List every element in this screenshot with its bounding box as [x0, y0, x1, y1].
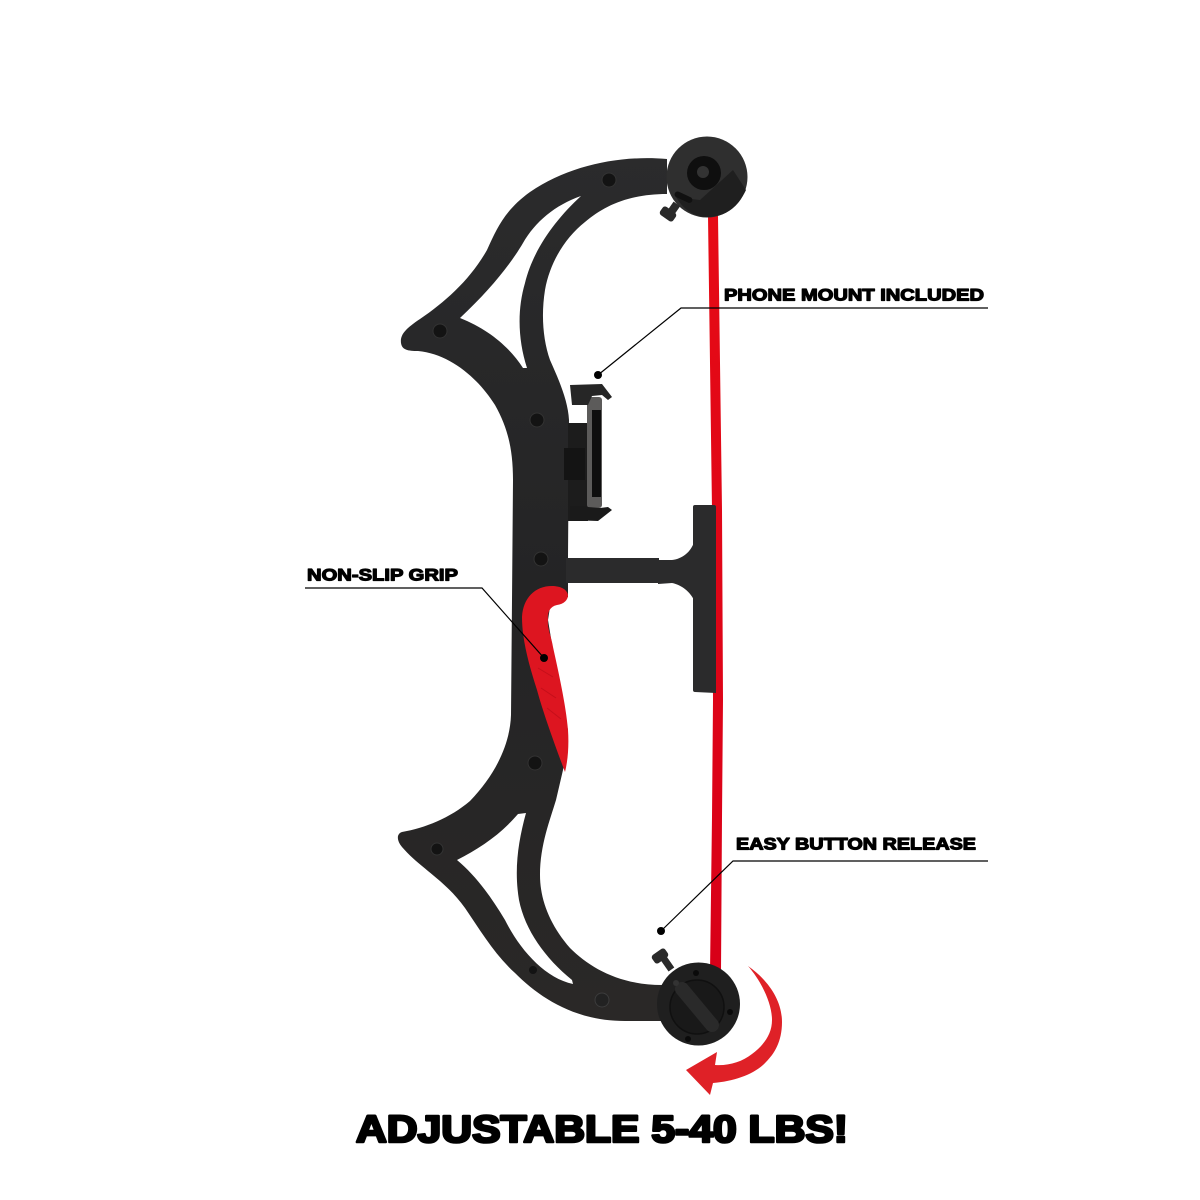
phone mount label: PHONE MOUNT INCLUDED	[724, 285, 984, 304]
stabilizer T-handle	[566, 505, 716, 693]
top pulley	[659, 136, 748, 223]
top pulley slot	[674, 190, 693, 204]
phone mount	[564, 384, 612, 521]
mount body	[568, 423, 588, 521]
handle plate	[693, 505, 716, 693]
top pulley disc	[666, 136, 748, 218]
bow riser and limbs	[398, 158, 667, 1021]
callout: phone mount	[594, 285, 988, 379]
top pulley hub	[687, 156, 721, 190]
phone mount dot	[594, 371, 602, 379]
bottom pulley	[651, 947, 740, 1046]
button release dot	[657, 927, 665, 935]
callout: non-slip grip	[305, 565, 548, 662]
bowstring	[708, 216, 723, 972]
bow	[398, 158, 667, 1021]
top pulley shading	[676, 170, 746, 217]
bottom release button	[651, 947, 674, 971]
bottom pulley disc	[657, 962, 740, 1046]
grip leader line	[305, 588, 544, 658]
top clip	[570, 384, 612, 405]
callout: easy button release	[657, 834, 988, 935]
grip dot	[540, 654, 548, 662]
top release button	[659, 202, 680, 223]
top pulley screw	[697, 166, 709, 178]
flared neck	[658, 542, 694, 600]
phone edge	[587, 397, 602, 508]
button release leader line	[661, 861, 988, 931]
mount side block	[564, 448, 585, 480]
bow screws	[431, 173, 616, 1007]
title: ADJUSTABLE 5-40 LBS!	[356, 1109, 848, 1151]
phone screen	[592, 410, 601, 497]
red grip	[522, 586, 568, 772]
grip ridges	[538, 668, 561, 719]
grip shape	[522, 586, 568, 772]
red rotation arrow	[686, 966, 782, 1095]
phone mount leader line	[598, 308, 988, 375]
grip label: NON-SLIP GRIP	[307, 565, 458, 584]
bottom pulley cover	[670, 980, 724, 1034]
button release label: EASY BUTTON RELEASE	[736, 834, 976, 853]
bottom pulley screws	[673, 970, 733, 1042]
bottom pulley knob	[682, 989, 712, 1025]
bottom clip	[570, 506, 612, 521]
handle bar	[566, 558, 659, 583]
